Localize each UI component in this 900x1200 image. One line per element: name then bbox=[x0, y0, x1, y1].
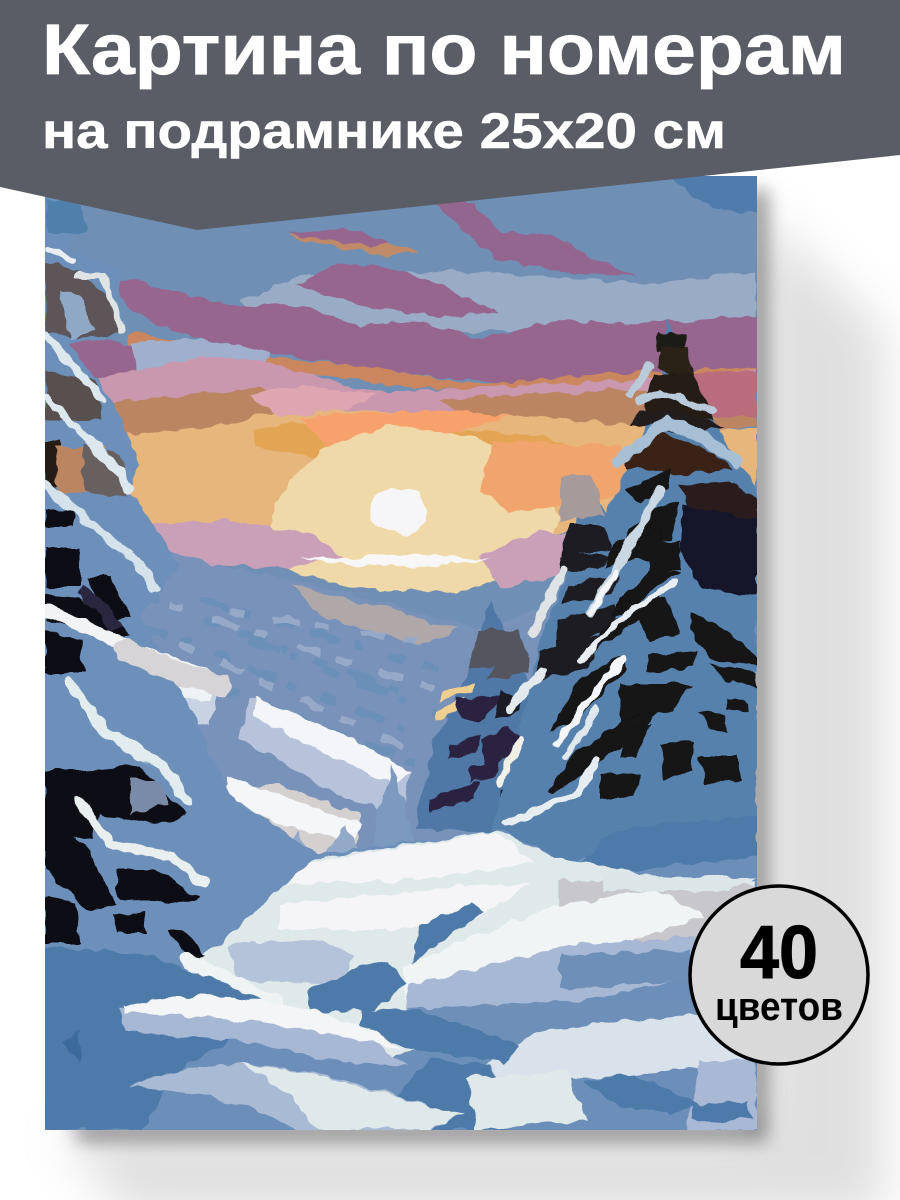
black branch shadows bbox=[548, 468, 757, 799]
sky clouds and sunset glow bbox=[69, 176, 757, 594]
foreground snow drifts bbox=[60, 997, 465, 1134]
canvas drop shadow bbox=[60, 190, 885, 1200]
header banner bbox=[0, 0, 900, 230]
title: Картина по номерам bbox=[42, 11, 846, 90]
white snow ridges bbox=[500, 365, 737, 825]
distant forest hills bbox=[140, 551, 556, 850]
badge label: цветов bbox=[715, 985, 843, 1029]
small spruce dark tiers bbox=[535, 474, 620, 680]
upper tiers bbox=[627, 333, 757, 531]
mid spruce bbox=[416, 601, 530, 834]
snow field bbox=[45, 816, 757, 1130]
badge number: 40 bbox=[740, 910, 818, 994]
subtitle: на подрамнике 25х20 см bbox=[42, 103, 726, 159]
snow ridges bbox=[45, 250, 277, 1003]
left snowy spruce branches bbox=[30, 190, 320, 1130]
sky base bbox=[69, 179, 757, 672]
painting: winter sunset landscape bbox=[45, 176, 757, 1130]
snowy slopes in the valley bbox=[178, 686, 412, 854]
right large spruce bbox=[490, 320, 757, 880]
sun bbox=[370, 488, 427, 534]
badge: 40 colours bbox=[690, 886, 868, 1064]
